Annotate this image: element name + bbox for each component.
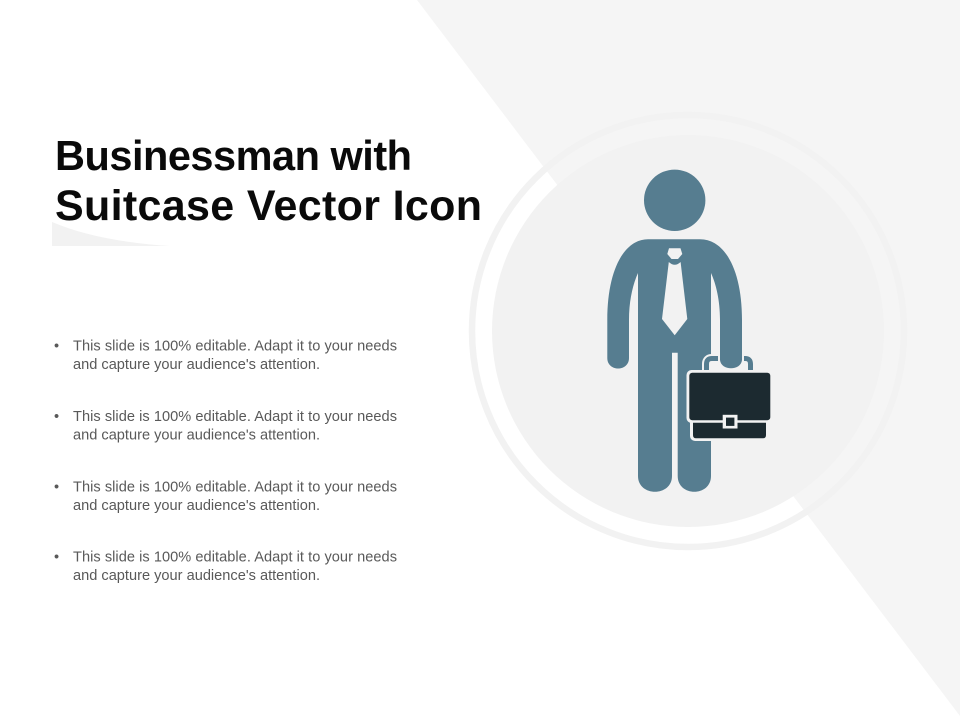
bullet text 1: and capture your audience's attention. [73,357,320,373]
briefcase lid [689,373,770,420]
bullet text 1 [54,338,397,373]
briefcase halo [686,370,773,423]
title: Suitcase Vector Icon [55,182,482,230]
tie [662,248,687,335]
bullet list [54,338,397,584]
briefcase [686,352,773,441]
outer ring [472,115,904,547]
bullet text 1: • [54,338,59,354]
title accent shape [52,222,170,246]
title [55,132,482,230]
bullet text 4: and capture your audience's attention. [73,568,320,584]
briefcase base [693,423,766,438]
inner circle [492,135,884,527]
title: Businessman with [55,132,412,179]
bullet text 2: and capture your audience's attention. [73,428,320,444]
briefcase clasp [723,415,738,428]
bullet text 4: • [54,550,59,566]
bullet text 2: • [54,409,59,425]
bullet text 3: and capture your audience's attention. [73,498,320,514]
bullet text 4: This slide is 100% editable. Adapt it to your needs [73,550,397,566]
hand [718,352,744,370]
bullet text 4 [54,550,397,584]
body [607,239,742,492]
bullet text 3 [54,480,397,514]
bullet text 3: This slide is 100% editable. Adapt it to your needs [73,480,397,496]
icon: businessman with suitcase [607,170,773,492]
background diagonal panel [417,0,960,716]
bullet text 1: This slide is 100% editable. Adapt it to your needs [73,338,397,354]
bullet text 2: This slide is 100% editable. Adapt it to your needs [73,409,397,425]
bullet text 3: • [54,480,59,496]
briefcase handle [706,358,750,376]
bullet text 2 [54,409,397,444]
head [644,170,705,231]
